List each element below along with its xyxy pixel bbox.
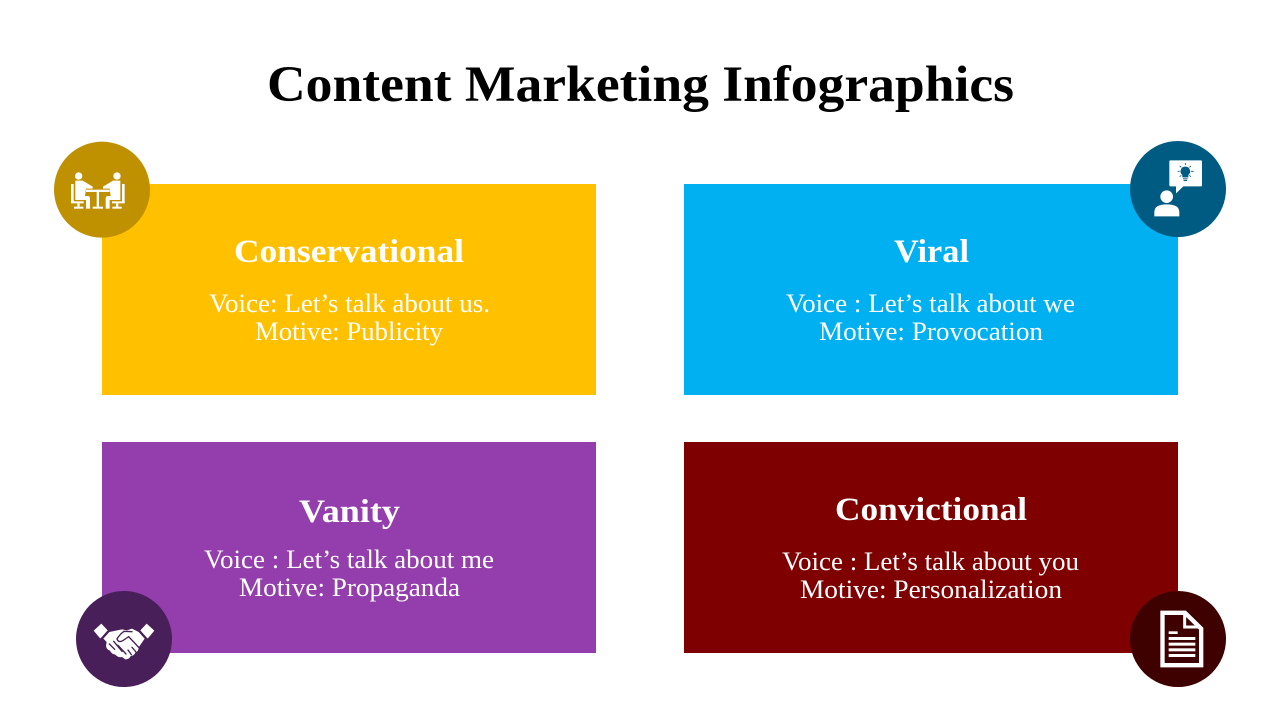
text block: convictional voice and motive: Voice : Let’s talk about you [782, 546, 1079, 576]
heading: viral: Viral [894, 234, 969, 270]
text block: vanity voice and motive: Voice : Let’s talk about me [204, 544, 494, 574]
text block: viral voice and motive [786, 288, 1075, 346]
text block: conservational voice and motive: Motive: Publicity [255, 316, 444, 346]
text block: conservational voice and motive: Voice: Let’s talk about us. [209, 288, 490, 318]
icon: handshake [76, 591, 172, 687]
heading: vanity: Vanity [299, 494, 401, 530]
panel: convictional [684, 442, 1178, 653]
text block: vanity voice and motive [204, 544, 494, 602]
panel: vanity [102, 442, 596, 653]
heading: conservational: Conservational [234, 234, 464, 270]
title: Content Marketing Infographics [267, 57, 1014, 113]
text block: convictional voice and motive [782, 546, 1079, 604]
text block: conservational voice and motive [209, 288, 490, 346]
heading: convictional: Convictional [835, 492, 1027, 528]
icon: person with idea speech bubble [1130, 141, 1226, 237]
text block: viral voice and motive: Voice : Let’s talk about we [786, 288, 1075, 318]
panel: conservational [102, 184, 596, 395]
text block: convictional voice and motive: Motive: Personalization [800, 574, 1062, 604]
icon: two people at a table [54, 142, 150, 238]
panel: viral [684, 184, 1178, 395]
text block: vanity voice and motive: Motive: Propaganda [239, 572, 460, 602]
text block: viral voice and motive: Motive: Provocation [819, 316, 1043, 346]
icon: document [1130, 591, 1226, 687]
